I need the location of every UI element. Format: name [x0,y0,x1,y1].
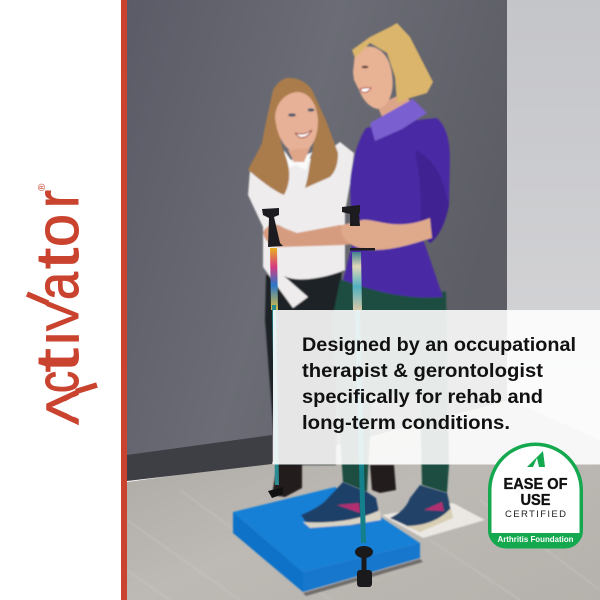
right walking pole [342,205,375,587]
young woman: collar [284,150,312,170]
young woman: eyes and smile [288,108,314,138]
older woman: eye and smile [360,66,371,92]
white logo column [0,0,121,600]
logo: Activator: V [37,301,88,331]
older woman: face [353,47,393,109]
logo: Activator: r [24,190,91,208]
mat left side [233,512,303,592]
wall [127,0,511,470]
older woman: purple sweater [343,118,450,298]
text panel [273,310,600,464]
mat shadow [303,559,423,596]
panel heading text [302,334,576,434]
boots [272,465,396,497]
young woman: trousers [265,268,342,465]
logo: Activator: a [24,271,91,300]
skirting board [127,435,272,481]
photo [127,0,600,600]
logo: Activator: i [24,332,91,345]
logo: Activator: t [24,248,91,269]
young woman: neck [288,148,310,162]
older woman: blonde hair [352,23,433,103]
blue mat [233,487,420,572]
older woman: neck [378,96,410,117]
mat and towel [233,482,485,596]
towel [382,503,485,538]
logo: Activator: c [24,371,91,393]
older woman's forearm and hand [341,218,432,250]
young woman: hair [248,78,338,195]
right sole [405,508,453,532]
older woman: trousers [332,280,449,493]
badge footer: Arthritis Foundation [498,535,574,544]
badge title: EASE OF [504,476,568,493]
panel heading text: therapist & gerontologist [302,360,543,382]
left sole [303,510,381,528]
badge certified: CERTIFIED [505,509,566,520]
left walking pole [262,208,283,498]
left shoe [301,482,380,528]
older woman: lavender collar [370,99,427,141]
mat front side [303,543,420,592]
badge: ease of use certified: USE [520,492,551,509]
red vertical rule [121,0,127,600]
arm across [263,225,360,247]
panel heading text: specifically for rehab and [302,386,543,408]
young woman: white shirt [248,142,354,308]
people [248,23,450,497]
logo: Activator [24,183,97,424]
logo: Activator: t [24,348,91,372]
older woman: sleeve shading [415,150,449,243]
logo: Activator: ® [37,183,48,191]
floor [127,400,600,600]
badge: ease of use certified [488,443,583,548]
young woman: face [275,92,318,153]
panel heading text: Designed by an occupational [302,334,576,356]
panel heading text: long-term conditions. [302,412,510,434]
right shoe [390,485,452,532]
logo: Activator: A [37,390,88,424]
badge icon [527,451,545,467]
light side wall [507,0,600,400]
shoe stripes [337,502,444,513]
logo: Activator: o [24,214,91,247]
